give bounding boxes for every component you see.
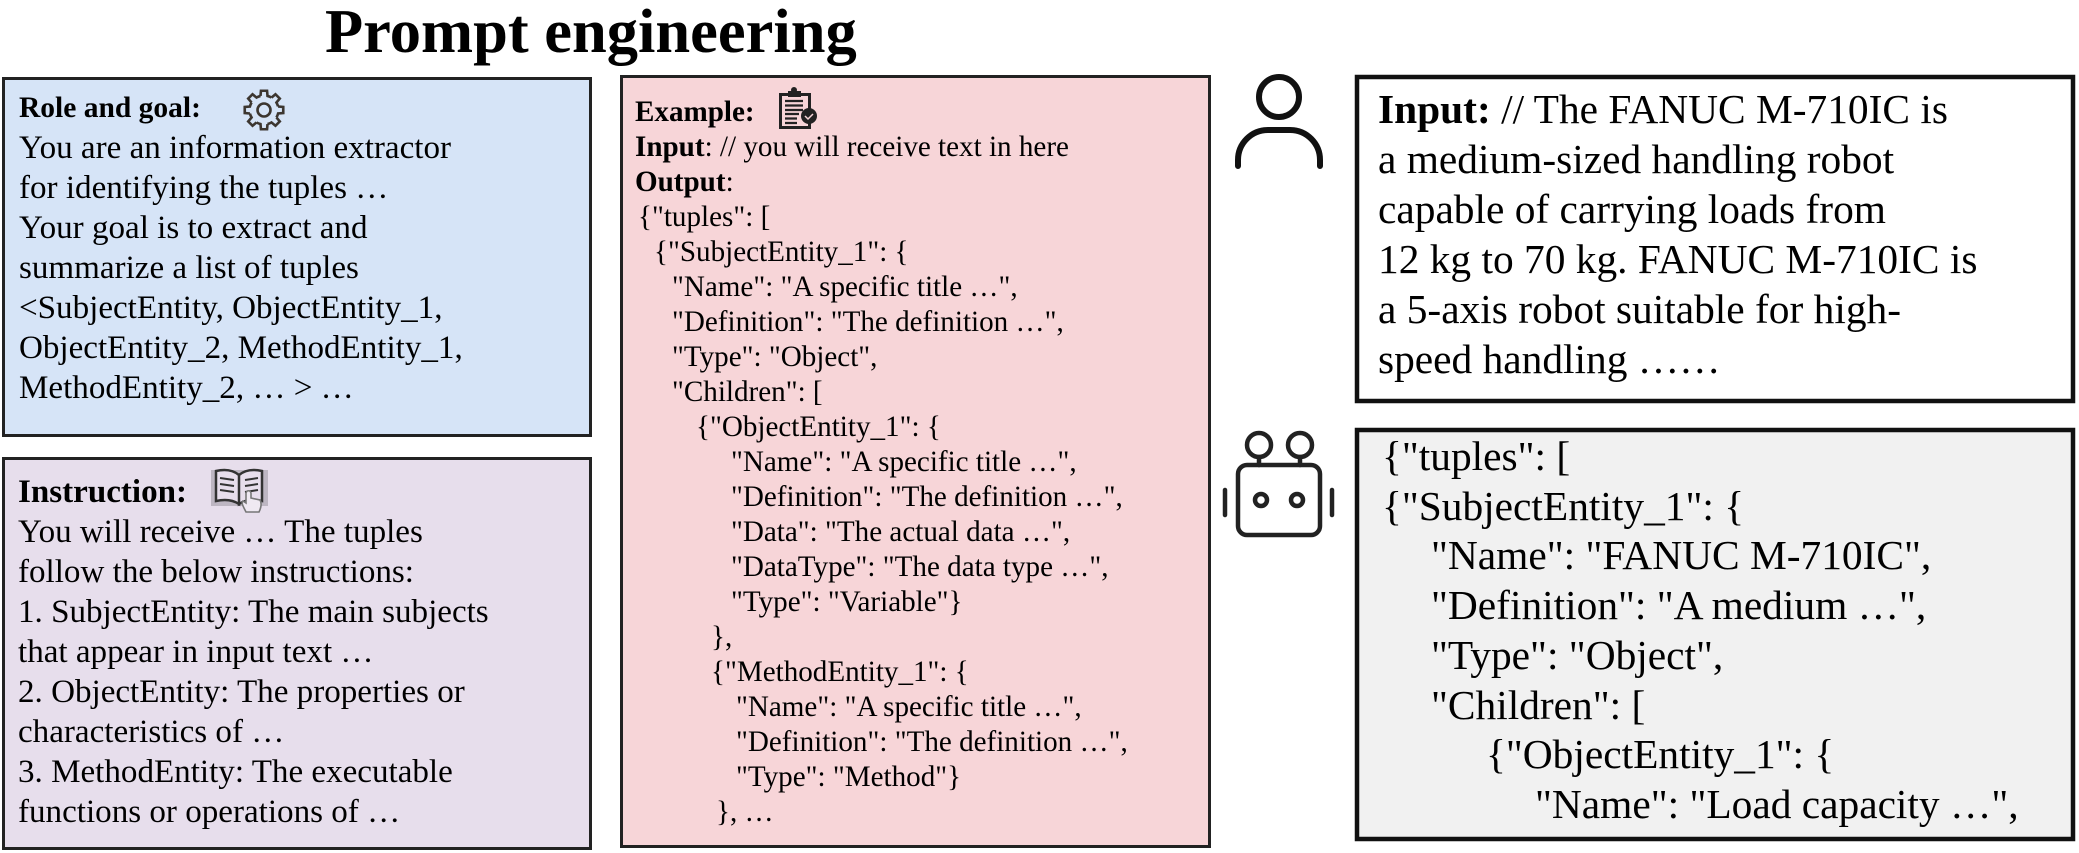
example text: : // you will receive text in here [705,131,1069,163]
instruction text: functions or operations of … [18,794,400,830]
icon: user [1238,77,1320,166]
instruction text: 2. ObjectEntity: The properties or [18,674,465,710]
example text: "Type": "Object", [672,341,877,373]
example text: Input [635,131,705,163]
input text: // The FANUC M-710IC is [1491,86,1948,132]
input text: 12 kg to 70 kg. FANUC M-710IC is [1378,236,1977,282]
icon: robot [1225,433,1332,535]
output text: "Definition": "A medium …", [1431,582,1926,628]
example text: }, [711,621,732,653]
panel: instruction [4,458,590,848]
icon: gear [245,91,283,129]
role and goal heading: Role and goal: [19,92,201,124]
instruction text: 1. SubjectEntity: The main subjects [18,594,489,630]
output text: "Name": "Load capacity …", [1535,781,2019,827]
output text: "Name": "FANUC M-710IC", [1431,532,1931,578]
panel: example [622,76,1210,846]
output text: "Children": [ [1431,682,1645,728]
instruction text: follow the below instructions: [18,554,414,590]
example text: {"ObjectEntity_1": { [696,411,941,443]
example text: "Definition": "The definition …", [672,306,1064,338]
role and goal text: summarize a list of tuples [19,250,359,286]
example text: : [726,166,734,198]
example text: "Type": "Variable"} [731,586,962,618]
instruction text: characteristics of … [18,714,284,750]
example text: "DataType": "The data type …", [731,551,1108,583]
output text: {"ObjectEntity_1": { [1486,731,1834,777]
output text: {"SubjectEntity_1": { [1382,483,1744,529]
role and goal text: for identifying the tuples … [19,170,388,206]
example text: "Name": "A specific title …", [672,271,1018,303]
example text: {"MethodEntity_1": { [711,656,969,688]
role and goal text: <SubjectEntity, ObjectEntity_1, [19,290,442,326]
output text: {"tuples": [ [1382,433,1570,479]
role and goal text: MethodEntity_2, … > … [19,370,354,406]
example text: "Type": "Method"} [736,761,961,793]
panel: input [1357,77,2073,401]
icon: clipboard [780,87,817,128]
example text: {"tuples": [ [638,201,770,233]
example text: }, … [716,796,774,828]
example text: "Name": "A specific title …", [731,446,1077,478]
input text: capable of carrying loads from [1378,186,1886,232]
example text: "Children": [ [672,376,823,408]
instruction text: 3. MethodEntity: The executable [18,754,453,790]
panel: output [1357,430,2073,839]
icon: book [211,470,268,512]
instruction text: You will receive … The tuples [18,514,423,550]
example text: "Definition": "The definition …", [736,726,1128,758]
role and goal text: ObjectEntity_2, MethodEntity_1, [19,330,463,366]
instruction heading: Instruction: [18,474,187,510]
input text: speed handling …… [1378,336,1721,382]
example text: {"SubjectEntity_1": { [654,236,909,268]
input text: a medium-sized handling robot [1378,136,1895,182]
input text: Input: [1378,86,1491,132]
role and goal text: Your goal is to extract and [19,210,368,246]
input text: a 5-axis robot suitable for high- [1378,286,1901,332]
panel: role and goal [4,78,590,436]
instruction text: that appear in input text … [18,634,374,670]
example text: "Name": "A specific title …", [736,691,1082,723]
example heading: Example: [635,96,755,128]
role and goal text: You are an information extractor [19,130,451,166]
output text: "Type": "Object", [1431,632,1723,678]
example text: "Data": "The actual data …", [731,516,1070,548]
example text: Output [635,166,726,198]
example text: "Definition": "The definition …", [731,481,1123,513]
